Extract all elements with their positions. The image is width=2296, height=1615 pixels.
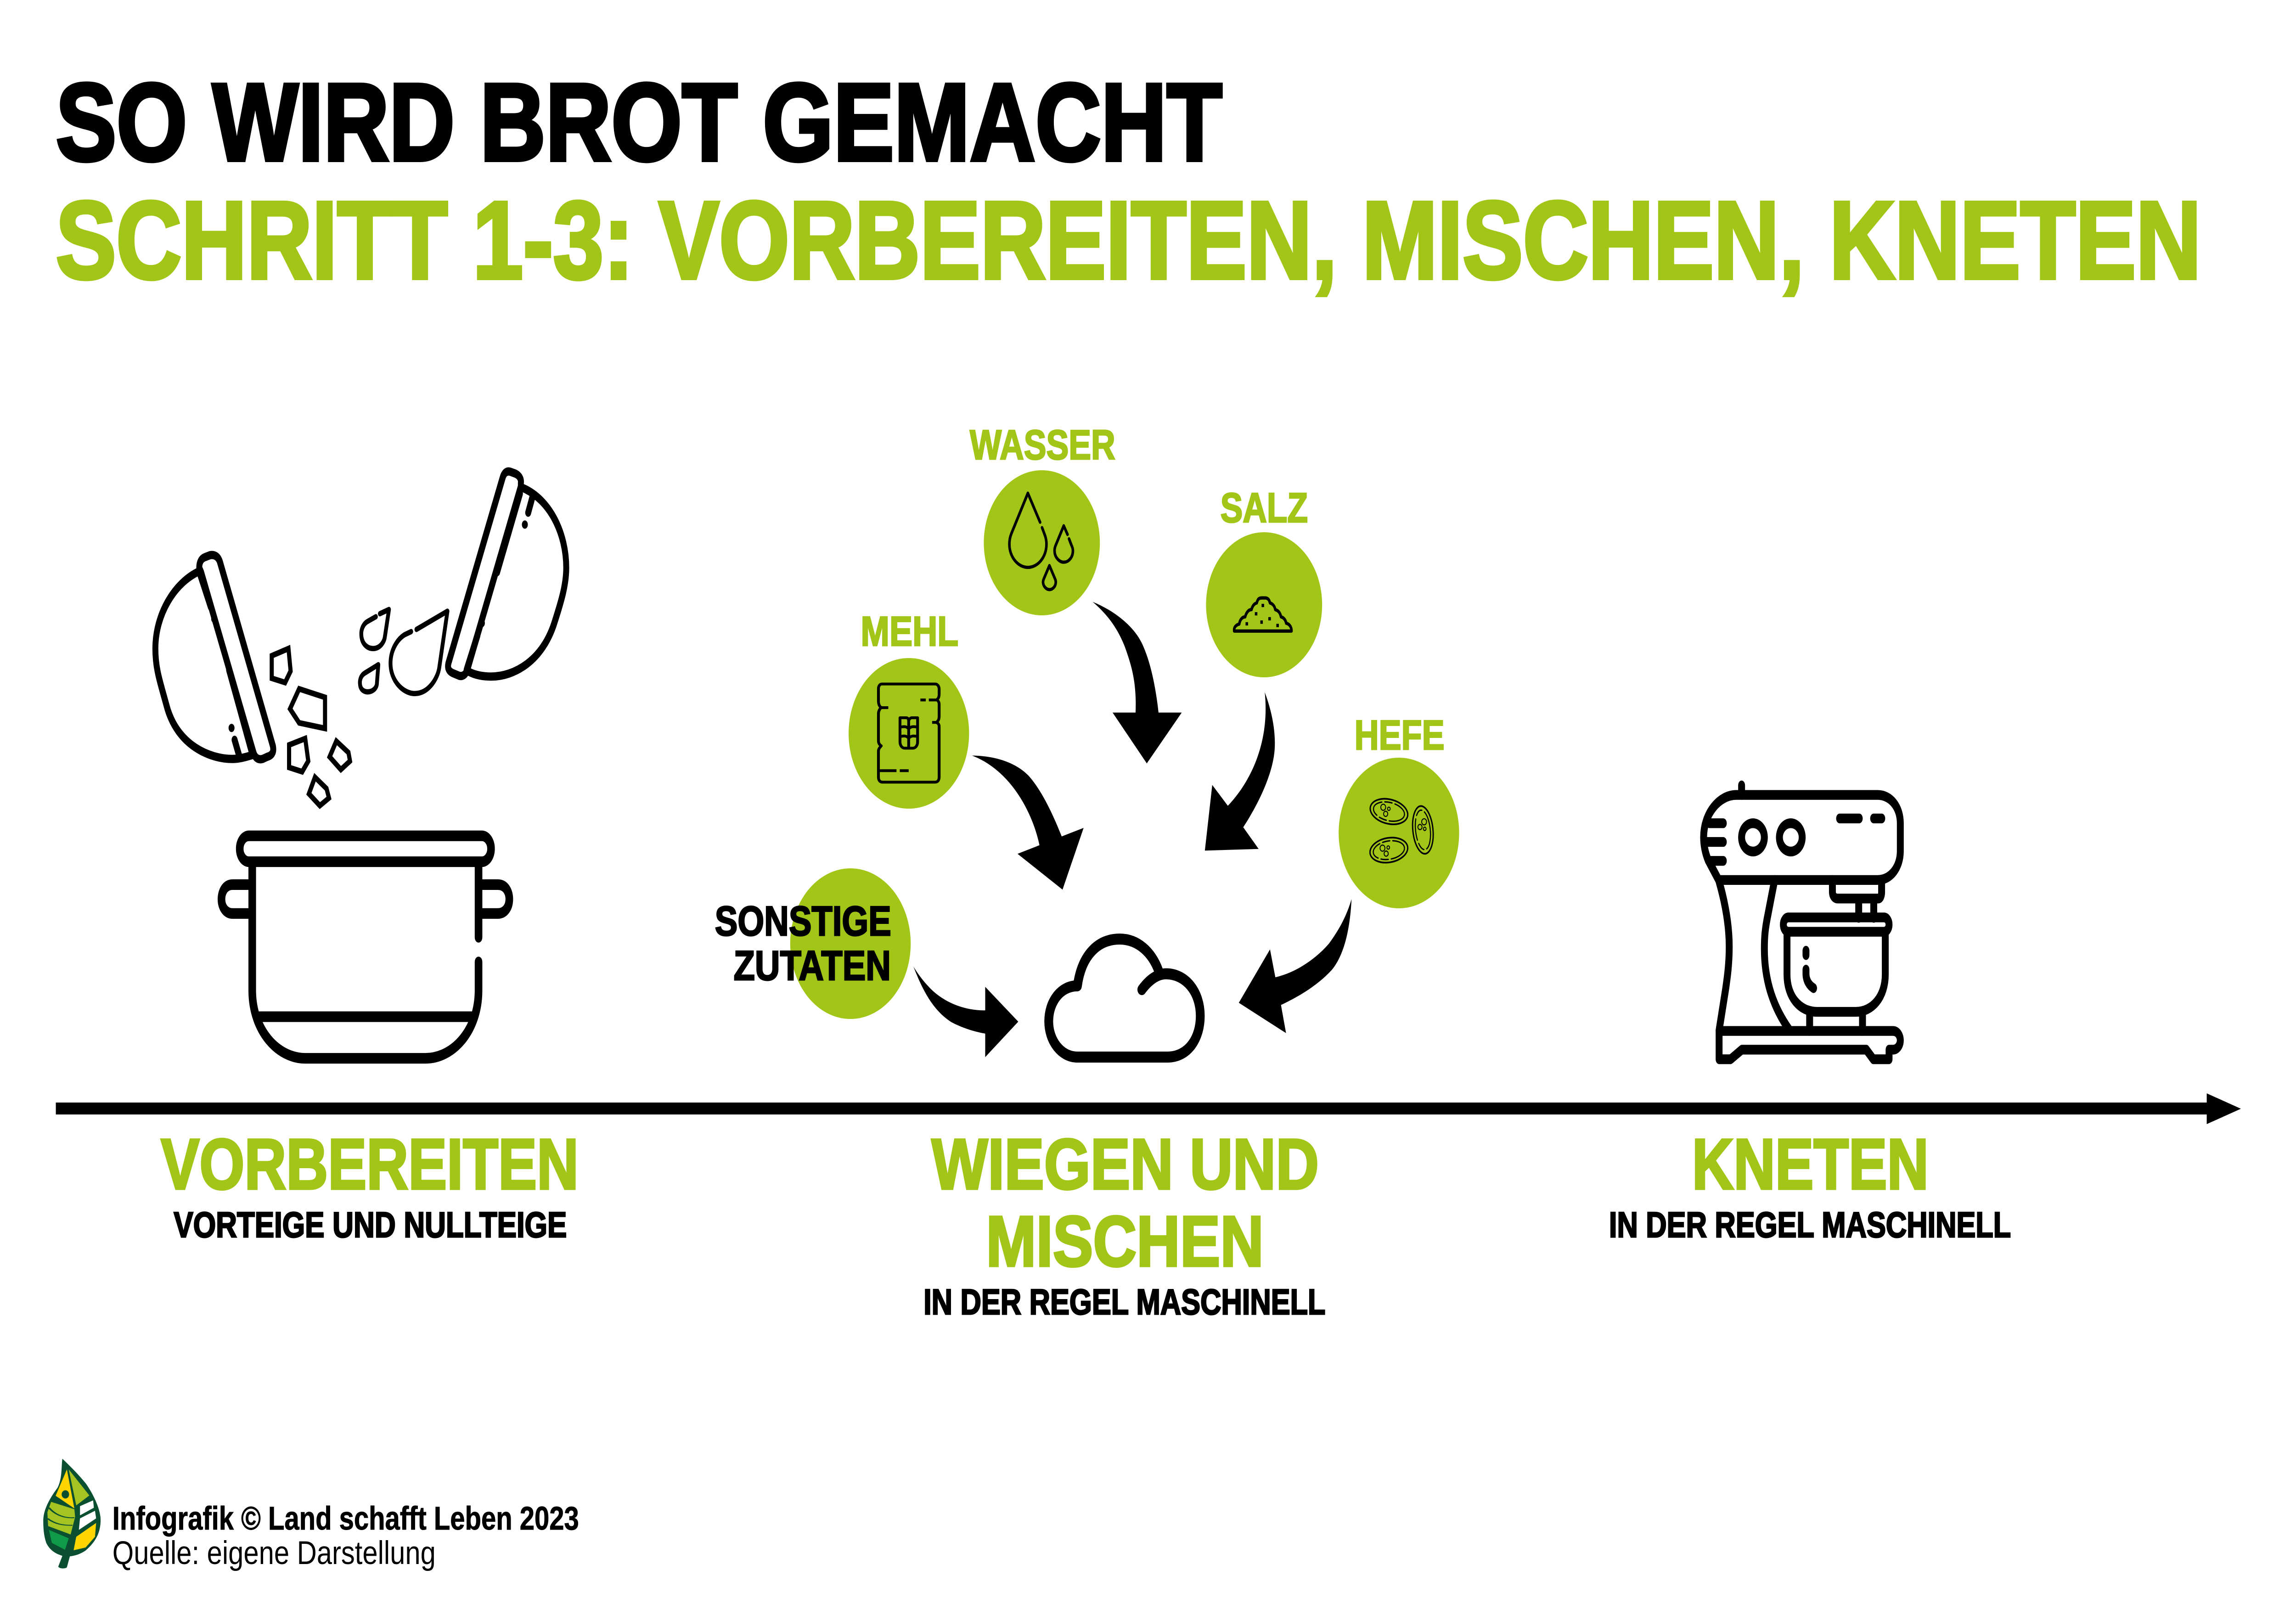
step note: VORTEIGE UND NULLTEIGE bbox=[174, 1204, 567, 1245]
icon: yeast cells bbox=[1368, 795, 1435, 865]
label: Sonstige Zutaten bbox=[715, 898, 891, 989]
step heading: MISCHEN bbox=[986, 1201, 1264, 1281]
mixer head bbox=[1704, 785, 1900, 880]
subtitle: SCHRITT 1-3: VORBEREITEN, MISCHEN, KNETEN bbox=[56, 179, 2201, 302]
icon: flour pieces bbox=[272, 648, 350, 805]
step heading: KNETEN bbox=[1692, 1124, 1929, 1204]
credit text bbox=[113, 1500, 579, 1571]
icon: flour bag bbox=[878, 684, 939, 782]
icon: pot bbox=[221, 836, 509, 1058]
circle: Mehl bbox=[849, 658, 969, 809]
source line: Quelle: eigene Darstellung bbox=[113, 1535, 436, 1571]
label: Hefe: HEFE bbox=[1355, 712, 1445, 759]
step note: IN DER REGEL MASCHINELL bbox=[1609, 1204, 2011, 1245]
mixer bowl bbox=[1784, 880, 1889, 1031]
circle: Salz bbox=[1206, 532, 1322, 677]
arrow: from Hefe bbox=[1239, 899, 1351, 1033]
icon: dough cloud bbox=[1049, 939, 1200, 1057]
step: Vorbereiten bbox=[161, 1124, 579, 1245]
mixer column bbox=[1719, 880, 1790, 1030]
circle: Sonstige Zutaten bbox=[790, 868, 911, 1019]
arrow: from Sonstige Zutaten bbox=[913, 967, 1018, 1057]
icon: left scoop bbox=[155, 555, 273, 759]
icon: pot with ingredients bbox=[155, 472, 566, 1058]
title: SO WIRD BROT GEMACHT bbox=[56, 61, 1222, 184]
logo: leaf bbox=[43, 1459, 101, 1569]
circle: Wasser bbox=[984, 470, 1100, 615]
step: Kneten bbox=[1609, 1124, 2011, 1245]
label: Mehl: MEHL bbox=[861, 608, 958, 655]
label: Salz: SALZ bbox=[1221, 484, 1308, 531]
arrow: from Salz bbox=[1205, 692, 1275, 850]
ingredient: Wasser bbox=[970, 422, 1115, 615]
mixer base bbox=[1719, 1031, 1900, 1059]
timeline arrow bbox=[56, 1093, 2241, 1124]
icon: right scoop bbox=[448, 472, 566, 676]
step heading: VORBEREITEN bbox=[161, 1124, 579, 1204]
credit line: Infografik © Land schafft Leben 2023 bbox=[113, 1500, 579, 1536]
step: Wiegen und Mischen bbox=[923, 1124, 1325, 1322]
ingredient: Mehl bbox=[849, 608, 969, 809]
step note: IN DER REGEL MASCHINELL bbox=[923, 1282, 1325, 1322]
ingredient: Salz bbox=[1206, 484, 1322, 677]
label: Sonstige Zutaten: ZUTATEN bbox=[734, 942, 891, 989]
ingredient: Sonstige Zutaten bbox=[715, 868, 911, 1019]
step heading: WIEGEN UND bbox=[932, 1124, 1319, 1204]
icon: salt pile bbox=[1234, 598, 1292, 631]
icon: water drops bbox=[1009, 493, 1073, 590]
icon: stand mixer bbox=[1704, 785, 1900, 1059]
label: Sonstige Zutaten: SONSTIGE bbox=[715, 898, 891, 945]
icon: falling water drops bbox=[360, 609, 447, 693]
step heading bbox=[932, 1124, 1319, 1281]
label: Wasser: WASSER bbox=[970, 422, 1115, 468]
arrow: from Mehl bbox=[972, 755, 1084, 889]
ingredient: Hefe bbox=[1339, 712, 1459, 908]
circle: Hefe bbox=[1339, 758, 1459, 908]
arrow: from Wasser bbox=[1092, 602, 1182, 763]
